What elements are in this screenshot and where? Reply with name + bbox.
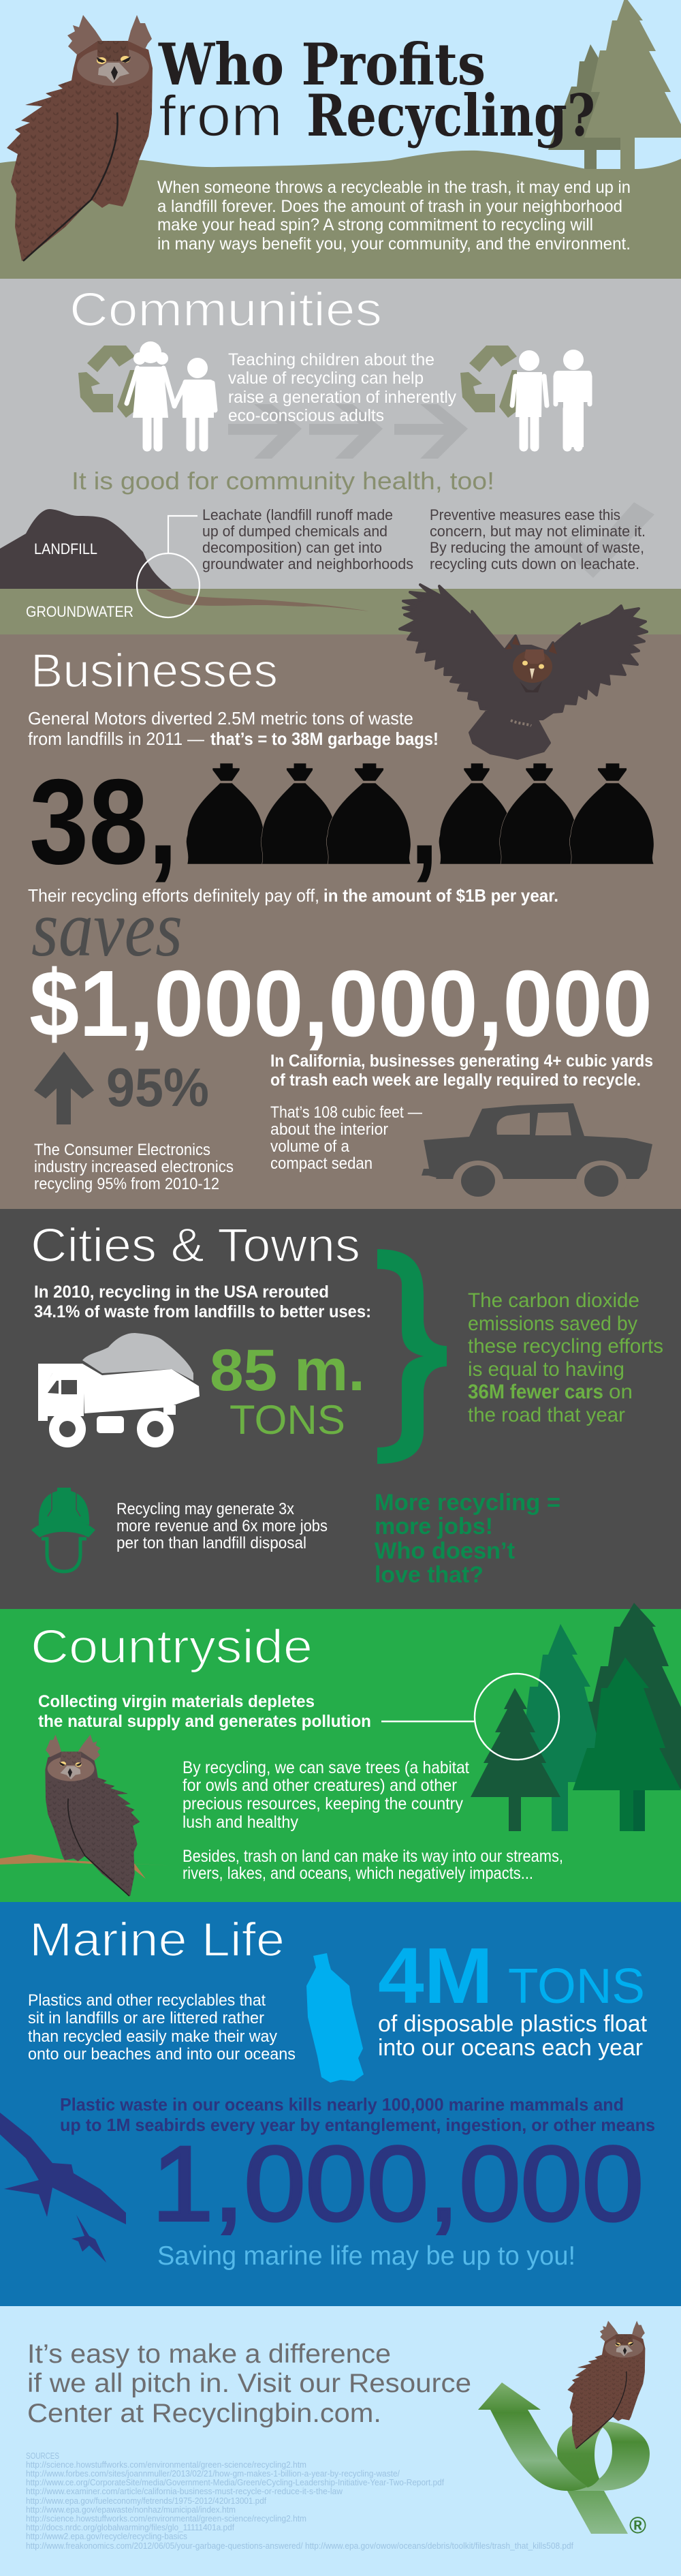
icon: small seabird [72, 2215, 106, 2263]
text: recycling efforts pay off: in the amount of $1B per year. [323, 885, 558, 906]
text: carbon dioxide: is equal to having [468, 1358, 624, 1381]
label: groundwater: GROUNDWATER [26, 603, 133, 620]
stat: 85 million tons: TONS [229, 1397, 345, 1443]
text: 2010 rerouted [34, 1283, 371, 1321]
text: plastics [28, 1991, 296, 2064]
title: Recycling? [306, 82, 595, 149]
text: jobs: per ton than landfill disposal [116, 1534, 306, 1552]
callout: more jobs: more jobs! [375, 1514, 493, 1539]
stat: 4M tons: 4M [378, 1931, 493, 2020]
intro text: a landfill forever. Does the amount of trash in your neighborhood [157, 197, 622, 216]
text: by recycling: precious resources, keeping the country [183, 1794, 463, 1813]
text: sources: http://docs.nrdc.org/globalwarming/files/glo_11111401a.pdf [26, 2523, 234, 2532]
text: general motors: General Motors diverted 2.5M metric tons of waste [28, 708, 413, 729]
text: teaching children: eco-conscious adults [228, 406, 384, 425]
title [158, 31, 595, 149]
callout circle and line [381, 1674, 559, 1760]
text: besides [183, 1847, 563, 1883]
text: leachate [202, 506, 413, 572]
icon: left recycle symbol [78, 346, 135, 418]
label: landfill: LANDFILL [34, 540, 97, 557]
icon: check mark [560, 502, 654, 578]
text: general motors: that’s = to 38M garbage bags! [210, 729, 439, 749]
heading: cities and towns: Cities & Towns [31, 1218, 360, 1272]
arrow: progress 2 [309, 404, 383, 459]
icon: perched owl on branch [45, 1734, 140, 1896]
intro text: in many ways benefit you, your community, and the environment. [157, 234, 631, 254]
text: 108 cubic feet: That’s 108 cubic feet — [270, 1103, 422, 1122]
stat: 4M tons: TONS [508, 1959, 645, 2014]
registered mark: ® [629, 2513, 646, 2539]
text: teaching children: value of recycling can help [228, 369, 424, 388]
icon: back pine [584, 1603, 681, 1789]
text: sources: http://www.freakonomics.com/2012/06/05/your-garbage-questions-answered/ http://www.epa.gov/owow/oceans/debris/toolkit/files/trash_that_kills508.pdf [26, 2541, 573, 2551]
icon: dump truck [38, 1333, 200, 1447]
icon: branch [0, 1854, 178, 1879]
text: sources: http://www.epa.gov/fueleconomy/fetrends/1975-2012/420r13001.pdf [26, 2496, 266, 2506]
icon: adult woman and man [512, 350, 592, 447]
intro text [157, 178, 631, 254]
text: carbon dioxide [468, 1289, 663, 1426]
callout: more jobs: More recycling = [375, 1490, 560, 1516]
heading: countryside: Countryside [31, 1620, 313, 1673]
icon: middle pine [518, 1624, 609, 1831]
text: leachate: up of dumped chemicals and [202, 523, 387, 540]
text: 108 cubic feet: volume of a [270, 1137, 350, 1156]
text: consumer electronics: industry increased electronics [34, 1158, 234, 1176]
text: consumer electronics [34, 1141, 234, 1193]
text: sources: http://www.ce.org/CorporateSite/media/Government-Media/Green/eCycling-Leadership-Initiative-Year-Two-Report.pdf [26, 2478, 444, 2487]
text: carbon dioxide: 36M fewer cars [468, 1381, 603, 1403]
script word: saves: saves [31, 884, 183, 973]
text: general motors [28, 708, 439, 749]
icons: garbage bags group 1 [186, 763, 411, 864]
text: california law [270, 1052, 653, 1090]
text: disposable plastics [378, 2011, 648, 2061]
icon: front right pine [573, 1657, 681, 1831]
text: 108 cubic feet [270, 1103, 422, 1173]
text: carbon dioxide: these recycling efforts [468, 1335, 663, 1358]
panel: cities and towns [0, 1209, 681, 1609]
text: preventive measures [430, 506, 646, 572]
big number: one billion dollars: $1,000,000,000 [29, 951, 652, 1056]
panel: businesses [0, 585, 681, 1209]
stat: 85 million tons [210, 1338, 365, 1443]
icon: perched owl [7, 15, 153, 261]
text: plastic waste kills: Plastic waste in our oceans kills nearly 100,000 marine mammals and [60, 2094, 624, 2115]
text: sources: http://www2.epa.gov/recycle/recycling-basics [26, 2532, 187, 2541]
text: plastics: sit in landfills or are littered rather [28, 2009, 264, 2027]
title: Who Profits [158, 31, 486, 98]
text: general motors: from landfills in 2011 — [28, 729, 204, 749]
text: california law: In California, businesses generating 4+ cubic yards [270, 1052, 653, 1071]
text: teaching children [228, 350, 456, 425]
panel: countryside [0, 1603, 681, 1902]
title: from [159, 84, 283, 148]
text: plastics: than recycled easily make their way [28, 2027, 277, 2046]
text: 2010 rerouted: 34.1% of waste from landfills to better uses: [34, 1302, 371, 1321]
text: by recycling: for owls and other creatures) and other [183, 1776, 457, 1795]
text: sources: http://www.examiner.com/article/california-business-must-recycle-or-reduce-it-s-the-law [26, 2487, 343, 2496]
arrow: up [34, 1052, 94, 1124]
text: by recycling [183, 1758, 469, 1832]
text: plastics: onto our beaches and into our oceans [28, 2045, 296, 2064]
text: consumer electronics: The Consumer Electronics [34, 1141, 210, 1159]
icon: mother and child [127, 341, 215, 447]
text: 108 cubic feet: about the interior [270, 1120, 388, 1139]
text: sources: http://science.howstuffworks.com/environmental/green-science/recycling2.htm [26, 2514, 306, 2524]
landfill mound [0, 509, 172, 589]
text: plastics: Plastics and other recyclables that [28, 1991, 266, 2010]
text: leachate: groundwater and neighborhoods [202, 555, 413, 572]
text: sources: SOURCES [26, 2451, 59, 2461]
text: carbon dioxide: The carbon dioxide [468, 1289, 639, 1312]
icon: large pine [584, 0, 681, 169]
icons: garbage bags group 2 [439, 763, 654, 864]
text: preventive measures: concern, but may not eliminate it. [430, 523, 646, 540]
icon: hard hat [31, 1488, 95, 1571]
intro text: When someone throws a recycleable in the trash, it may end up in [157, 178, 631, 197]
text: plastic waste kills [60, 2094, 655, 2135]
icon: plastic bottle [306, 1953, 364, 2083]
text: sources: http://www.epa.gov/epawaste/nonhaz/municipal/index.htm [26, 2505, 236, 2515]
text: sources: http://science.howstuffworks.com/environmental/green-science/recycling2.htm [26, 2460, 306, 2470]
callout: more jobs: Who doesn’t [375, 1538, 515, 1564]
heading: communities: Communities [69, 283, 382, 336]
text: jobs: more revenue and 6x more jobs [116, 1517, 328, 1535]
text: jobs: Recycling may generate 3x [116, 1500, 294, 1518]
icon: owl on logo [567, 2320, 645, 2449]
callout circle and leader [137, 516, 200, 617]
stat: 4M tons [378, 1931, 645, 2020]
text: call to action: if we all pitch in. Visit our Resource [27, 2369, 471, 2398]
callout: more jobs [375, 1490, 560, 1588]
text: saving marine life: Saving marine life may be up to you! [157, 2241, 575, 2271]
text: call to action: Center at Recyclingbin.com. [27, 2399, 381, 2428]
icon: recycling arrow logo [478, 2382, 650, 2534]
text: by recycling: By recycling, we can save trees (a habitat [183, 1758, 469, 1777]
panel: communities [0, 279, 681, 634]
text: plastic waste kills: up to 1M seabirds every year by entanglement, ingestion, or other means [60, 2115, 655, 2135]
text: carbon dioxide: the road that year [468, 1404, 625, 1426]
stat: one million: 1,000,000 [152, 2125, 644, 2243]
leachate runoff [146, 589, 369, 611]
arrow: progress 1 [228, 404, 302, 459]
groundwater band [0, 589, 681, 634]
text: disposable plastics: into our oceans each year [378, 2035, 643, 2061]
icon: small background pine [548, 44, 620, 169]
text: consumer electronics: recycling 95% from 2010-12 [34, 1175, 219, 1193]
text: besides: Besides, trash on land can make its way into our streams, [183, 1847, 563, 1866]
text: sources: http://www.forbes.com/sites/joannmuller/2013/02/21/how-gm-makes-1-billion-a-year-by-recycling-waste/ [26, 2469, 400, 2479]
text: virgin materials: the natural supply and generates pollution [38, 1712, 371, 1731]
ground hills [0, 151, 681, 279]
text: preventive measures: By reducing the amount of waste, [430, 539, 644, 556]
text: recycling efforts pay off [28, 885, 558, 906]
icon: front small pine [471, 1688, 560, 1831]
text: leachate: decomposition) can get into [202, 539, 382, 556]
text: preventive measures: Preventive measures ease this [430, 506, 620, 523]
text: leachate: Leachate (landfill runoff made [202, 506, 393, 523]
icon: flying owl [400, 585, 647, 758]
big comma: , [410, 754, 439, 889]
stat: 85 million tons: 85 m. [210, 1338, 365, 1403]
panel: footer [0, 2306, 681, 2576]
text: california law: of trash each week are legally required to recycle. [270, 1071, 641, 1090]
text: carbon dioxide: on [609, 1381, 633, 1403]
text: sources [26, 2451, 573, 2551]
subheading: community health: It is good for community health, too! [72, 467, 494, 495]
text: jobs [116, 1500, 328, 1552]
brace [377, 1249, 447, 1464]
icon: large seabird [0, 2113, 126, 2224]
icon: sedan [422, 1103, 654, 1209]
text: call to action: It’s easy to make a difference [27, 2340, 391, 2369]
text: recycling efforts pay off: Their recycling efforts definitely pay off, [28, 885, 319, 906]
text: disposable plastics: of disposable plastics float [378, 2011, 648, 2037]
panel: header [0, 0, 681, 279]
text: 108 cubic feet: compact sedan [270, 1154, 373, 1173]
callout: more jobs: love that? [375, 1562, 484, 1588]
text: by recycling: lush and healthy [183, 1813, 298, 1832]
text: teaching children: Teaching children about the [228, 350, 434, 369]
text: virgin materials [38, 1692, 371, 1731]
heading: businesses: Businesses [31, 644, 278, 697]
text: besides: rivers, lakes, and oceans, which negatively impacts... [183, 1864, 533, 1883]
intro text: make your head spin? A strong commitment to recycling will [157, 215, 593, 234]
text: preventive measures: recycling cuts down on leachate. [430, 555, 639, 572]
text: carbon dioxide: emissions saved by [468, 1313, 637, 1335]
stat: 95 percent: 95% [106, 1057, 209, 1118]
text: call to action [27, 2340, 471, 2428]
heading: marine life: Marine Life [29, 1913, 285, 1966]
text: virgin materials: Collecting virgin materials depletes [38, 1692, 315, 1711]
icon: right recycle symbol [460, 346, 517, 418]
arrow: progress 3 [394, 404, 468, 459]
panel: marine life [0, 1902, 681, 2306]
big number: 38: 38, [29, 754, 178, 889]
text: teaching children: raise a generation of inherently [228, 388, 456, 407]
text: 2010 rerouted: In 2010, recycling in the USA rerouted [34, 1283, 329, 1302]
